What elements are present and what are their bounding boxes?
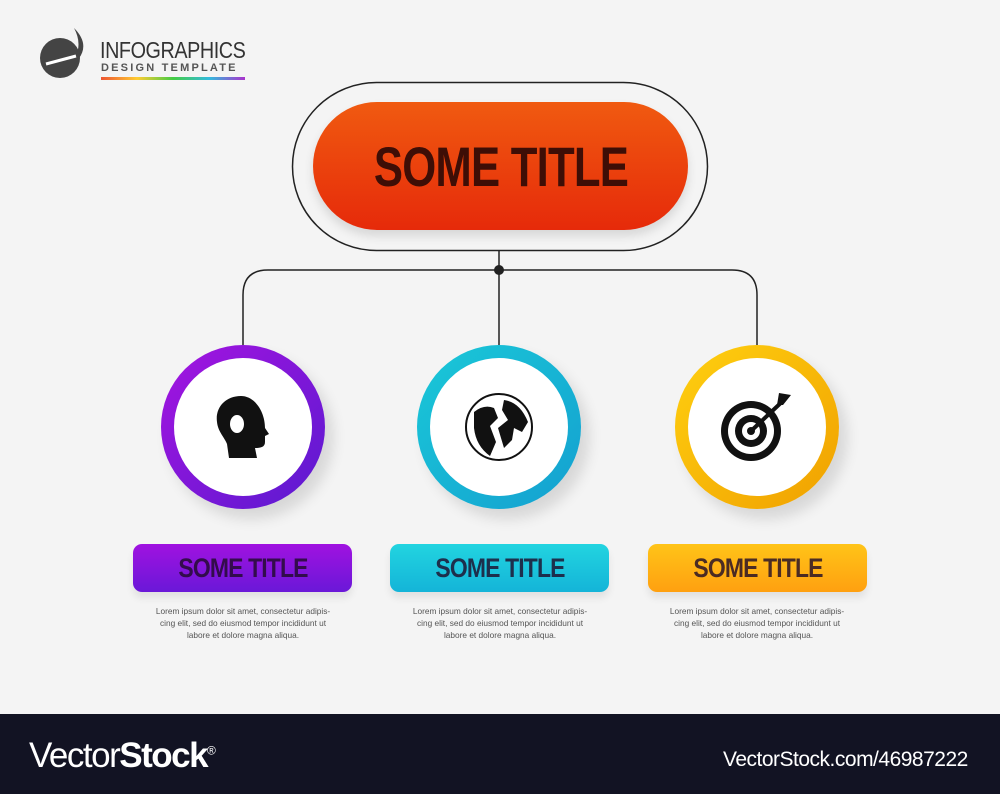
footer: VectorStock®: [29, 736, 214, 775]
logo: INFOGRAPHICS: [100, 37, 245, 63]
text 2: [413, 606, 587, 640]
circle: globe: [417, 345, 581, 509]
pill: orange: SOME TITLE: [693, 552, 822, 582]
pill: cyan: [390, 544, 609, 592]
text 3: cing elit, sed do eiusmod tempor incididunt ut: [674, 618, 840, 628]
circle: head: [161, 345, 325, 509]
pill: cyan: SOME TITLE: [435, 552, 564, 582]
pill: purple: [133, 544, 352, 592]
main title pill: SOME TITLE: [373, 134, 628, 198]
pill: purple: SOME TITLE: [178, 552, 307, 582]
text 2: cing elit, sed do eiusmod tempor incididunt ut: [417, 618, 583, 628]
pill: orange: [648, 544, 867, 592]
text 3: labore et dolore magna aliqua.: [701, 630, 813, 640]
text 2: Lorem ipsum dolor sit amet, consectetur adipis-: [413, 606, 587, 616]
logo: [40, 28, 245, 80]
circle: target: [675, 345, 839, 509]
text 1: labore et dolore magna aliqua.: [187, 630, 299, 640]
text 1: Lorem ipsum dolor sit amet, consectetur adipis-: [156, 606, 330, 616]
text 1: cing elit, sed do eiusmod tempor incididunt ut: [160, 618, 326, 628]
main title pill: [313, 102, 688, 230]
logo: DESIGN TEMPLATE: [101, 62, 238, 74]
footer: [0, 714, 1000, 794]
text 3: Lorem ipsum dolor sit amet, consectetur adipis-: [670, 606, 844, 616]
text 1: [156, 606, 330, 640]
footer: VectorStock.com/46987222: [723, 748, 968, 771]
text 2: labore et dolore magna aliqua.: [444, 630, 556, 640]
text 3: [670, 606, 844, 640]
